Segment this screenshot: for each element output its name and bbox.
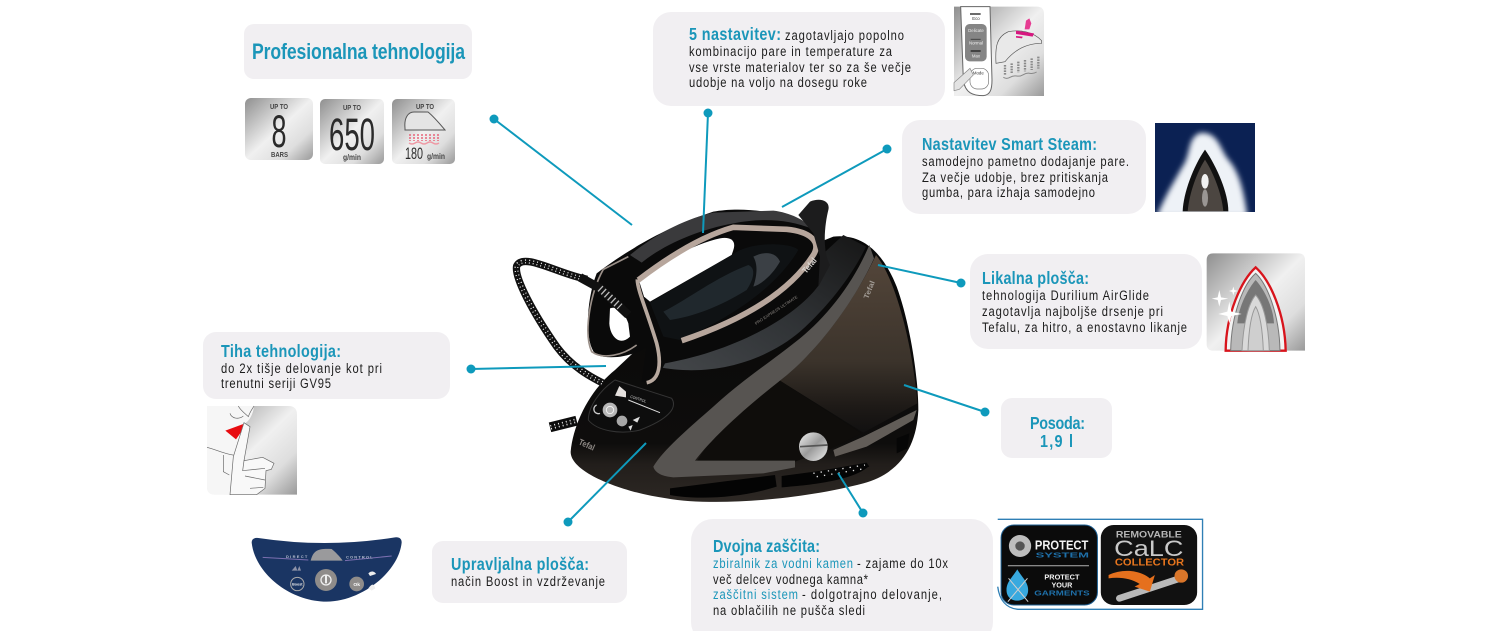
panel: 5 nastavitev bbox=[653, 12, 945, 106]
right glitter band bbox=[833, 410, 917, 457]
perforated dots bbox=[810, 463, 869, 477]
image: control panel diagram: CONTROL bbox=[346, 555, 373, 560]
cord boot bbox=[580, 277, 628, 315]
badge: protect system: PROTECT bbox=[1035, 537, 1089, 552]
panel: Dvojna zaščita: - zajame do 10x bbox=[857, 556, 949, 571]
panel: Nastavitev Smart Steam: Za večje udobje, brez pritiskanja bbox=[922, 170, 1109, 185]
heading panel: Profesionalna tehnologija bbox=[244, 24, 472, 79]
panel: Nastavitev Smart Steam: gumba, para izhaja samodejno bbox=[922, 185, 1095, 200]
image: mode selector: Delicate bbox=[968, 28, 984, 33]
panel: 5 nastavitev: kombinacijo pare in temperature za bbox=[689, 44, 893, 59]
dock bbox=[657, 235, 866, 370]
image: soleplate bbox=[1207, 253, 1305, 351]
tile: 650 g/min: 650 bbox=[329, 109, 375, 160]
handle grip bbox=[630, 211, 813, 263]
tile: 180 g/min: 180 bbox=[405, 144, 423, 163]
badge: protect system: PROTECT bbox=[1044, 572, 1080, 581]
image: control panel diagram bbox=[252, 537, 402, 602]
image: mode selector: Normal bbox=[969, 41, 983, 46]
glitter band bbox=[653, 245, 874, 477]
badge: calc collector: COLLECTOR bbox=[1115, 558, 1184, 569]
badge: protect system: GARMENTS bbox=[1034, 589, 1090, 598]
panel: Dvojna zaščita: Dvojna zaščita: bbox=[713, 537, 820, 556]
tile: 8 bars bbox=[245, 98, 313, 160]
badge: calc collector bbox=[1101, 525, 1197, 605]
tile: 180 g/min bbox=[392, 99, 455, 164]
image: mode selector: Eco bbox=[972, 16, 980, 21]
panel: Likalna plošča: tehnologija Durilium AirGlide bbox=[982, 288, 1149, 303]
panel: Dvojna zaščita: na oblačilih ne pušča sledi bbox=[713, 603, 865, 618]
panel: Dvojna zaščita: zaščitni sistem bbox=[713, 587, 798, 602]
iron body bbox=[588, 210, 825, 383]
tile: 180 g/min: g/min bbox=[427, 152, 445, 161]
panel: Tiha tehnologija bbox=[203, 332, 450, 399]
panel: Posoda: 1,9 l bbox=[1040, 432, 1073, 451]
callout lines and dots bbox=[466, 108, 990, 526]
hand bbox=[230, 423, 274, 495]
tile: 8 bars: BARS bbox=[271, 152, 288, 159]
panel: Likalna plošča: Likalna plošča: bbox=[982, 269, 1089, 288]
iron soleplate body bbox=[650, 244, 798, 340]
image: mode selector bbox=[954, 7, 1044, 96]
panel: Dvojna zaščita: več delcev vodnega kamna* bbox=[713, 572, 868, 587]
panel: 5 nastavitev: 5 nastavitev: bbox=[689, 25, 781, 44]
control panel bbox=[588, 380, 674, 432]
panel: Posoda: Posoda: bbox=[1030, 414, 1085, 433]
panel: Dvojna zaščita bbox=[691, 519, 993, 631]
panel: Upravljalna plošča bbox=[432, 541, 627, 603]
badge: protect system: YOUR bbox=[1051, 580, 1073, 589]
panel: Likalna plošča: zagotavlja najboljše drsenje pri bbox=[982, 304, 1163, 319]
lips bbox=[225, 424, 243, 439]
bottom vents bbox=[670, 475, 777, 498]
tile: 650 g/min: g/min bbox=[343, 153, 361, 162]
panel: Upravljalna plošča: način Boost in vzdrževanje bbox=[451, 574, 605, 589]
knob bbox=[799, 432, 828, 461]
tile: 8 bars: UP TO bbox=[270, 104, 288, 111]
cord bbox=[516, 261, 603, 383]
panel: Likalna plošča bbox=[970, 254, 1202, 349]
model name: PRO EXPRESS ULTIMATE bbox=[754, 294, 799, 326]
image: control panel diagram: Boost bbox=[292, 583, 303, 587]
steam trigger nose bbox=[798, 200, 830, 287]
panel: Tiha tehnologija: trenutni seriji GV95 bbox=[221, 376, 331, 391]
panel: Nastavitev Smart Steam bbox=[902, 120, 1146, 214]
handle window bbox=[638, 238, 734, 302]
image: control panel diagram: DIRECT bbox=[286, 554, 308, 559]
badges: protect system and calc collector bbox=[998, 519, 1203, 609]
brand: iron: Tefal bbox=[800, 256, 819, 275]
heading panel: Profesionalna tehnologija: Profesionalna tehnologija bbox=[252, 40, 466, 65]
panel: Dvojna zaščita: zbiralnik za vodni kamen bbox=[713, 556, 853, 571]
badge: calc collector: REMOVABLE bbox=[1116, 529, 1182, 539]
image: control panel diagram: Ok bbox=[353, 582, 360, 588]
panel: Nastavitev Smart Steam: Nastavitev Smart Steam: bbox=[922, 135, 1097, 154]
badge: protect system: SYSTEM bbox=[1036, 550, 1089, 559]
lower dark panel bbox=[697, 381, 862, 462]
image: steam around soleplate bbox=[1155, 123, 1255, 212]
panel: Upravljalna plošča: Upravljalna plošča: bbox=[451, 555, 589, 574]
panel: Dvojna zaščita: - dolgotrajno delovanje, bbox=[802, 587, 942, 602]
badge: protect system bbox=[1001, 525, 1097, 605]
panel: 5 nastavitev: vse vrste materialov ter so za še večje bbox=[689, 60, 911, 75]
control panel: CONTROL bbox=[630, 394, 648, 404]
panel: Likalna plošča: Tefalu, za hitro, a enostavno likanje bbox=[982, 320, 1187, 335]
brand: base: Tefal bbox=[577, 437, 596, 453]
panel: Posoda bbox=[1001, 398, 1112, 458]
tile: 650 g/min: UP TO bbox=[343, 105, 361, 112]
panel: Tiha tehnologija: Tiha tehnologija: bbox=[221, 342, 341, 361]
base body bbox=[571, 236, 918, 502]
brand: tank: Tefal bbox=[862, 279, 877, 300]
panel: Nastavitev Smart Steam: samodejno pametno dodajanje pare. bbox=[922, 154, 1129, 169]
tile: 8 bars: 8 bbox=[272, 106, 286, 157]
panel: Tiha tehnologija: do 2x tišje delovanje kot pri bbox=[221, 361, 382, 376]
image: silence gesture bbox=[207, 406, 297, 495]
steam generator iron bbox=[516, 200, 918, 502]
image: mode selector: Max bbox=[972, 53, 981, 58]
tile: 180 g/min: UP TO bbox=[416, 104, 434, 111]
badge: calc collector: CaLC bbox=[1114, 536, 1183, 561]
image: mode selector: Mode bbox=[973, 71, 984, 76]
rear hole bbox=[609, 308, 630, 341]
tile: 650 g/min bbox=[320, 99, 384, 164]
panel: 5 nastavitev: udobje na voljo na dosegu roke bbox=[689, 75, 867, 90]
rear cord piece bbox=[550, 421, 577, 427]
champagne trim bbox=[638, 227, 816, 341]
panel: 5 nastavitev: zagotavljajo popolno bbox=[785, 28, 904, 43]
water tank bbox=[780, 255, 917, 433]
